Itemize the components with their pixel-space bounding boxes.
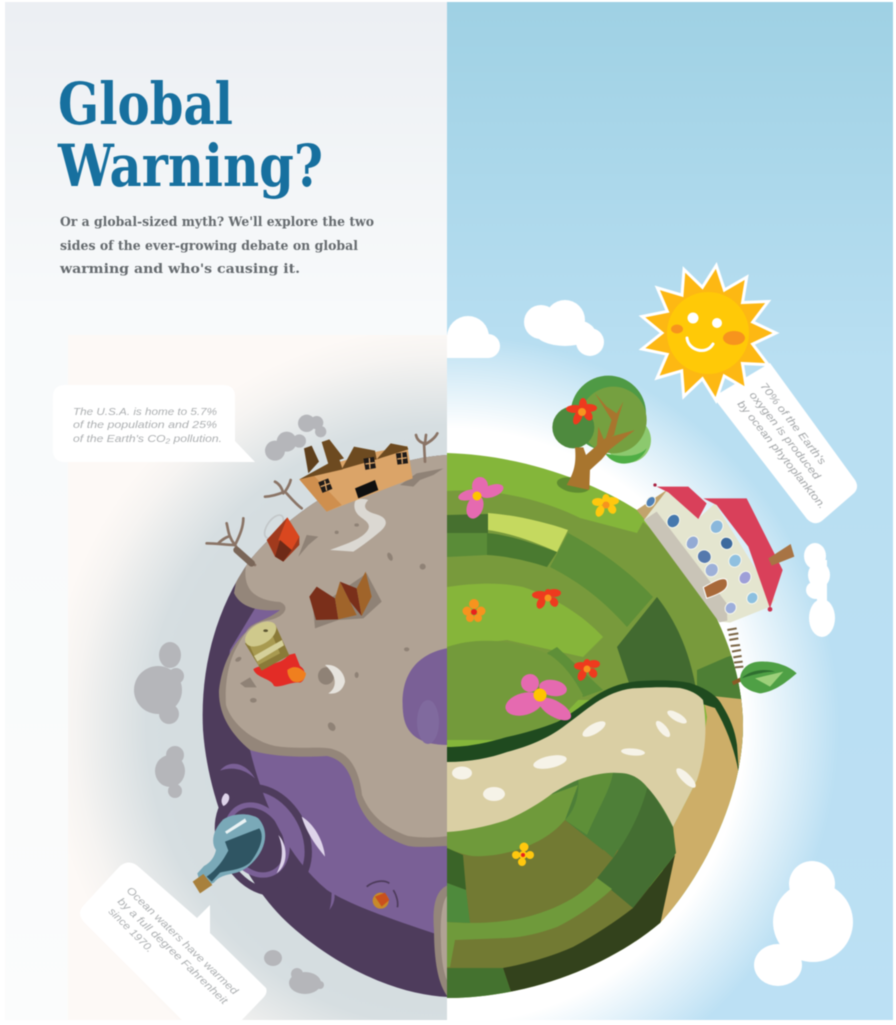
background: left half <box>5 2 447 1020</box>
upper fields <box>447 514 488 533</box>
title <box>57 70 323 200</box>
callout: ocean warming <box>80 862 267 1025</box>
flower: red <box>532 589 561 610</box>
bright field <box>447 584 603 657</box>
smoke clouds: polluted side <box>134 642 324 994</box>
road <box>447 687 705 832</box>
icon: burning house <box>261 512 299 562</box>
ocean dark rim <box>202 568 448 998</box>
small field <box>547 647 603 697</box>
icon: flowers <box>457 398 619 866</box>
callout: ocean warming: since 1970. <box>106 906 155 955</box>
subtitle: warming and who's causing it. <box>59 262 300 277</box>
below-road fields <box>446 850 634 968</box>
subtitle <box>59 215 374 277</box>
crescent <box>325 665 345 694</box>
subtitle: sides of the ever-growing debate on global <box>60 239 358 254</box>
title: Warning? <box>57 132 323 200</box>
callout: oxygen banner: 70% of the Earth's <box>758 381 829 468</box>
callout: U.S.A. pollution: of the Earth's CO₂ pollution. <box>73 433 222 445</box>
flower: red lower <box>574 659 600 682</box>
flower: yellow <box>592 494 619 518</box>
cloud: lower right <box>754 861 853 986</box>
smoke <box>265 415 326 461</box>
flower: yellow lower <box>512 842 534 866</box>
title: Global <box>58 70 233 138</box>
callout: oxygen banner <box>713 363 857 523</box>
ocean light purple <box>229 608 448 934</box>
icon: factory <box>265 415 413 512</box>
olive dome <box>447 641 583 740</box>
flower: pink top <box>457 477 505 521</box>
callout: ocean warming: Ocean waters have warmed <box>124 885 241 998</box>
flower: red on tree <box>566 398 597 426</box>
lake highlight <box>417 700 439 744</box>
door <box>703 579 728 598</box>
callout: oxygen banner: oxygen is produced <box>747 389 823 483</box>
olive band <box>447 490 750 700</box>
icon: bottle <box>193 814 265 893</box>
icon: small bush <box>733 661 797 693</box>
land sliver at bottom <box>434 885 448 997</box>
icon: sun <box>642 266 776 400</box>
subtitle: Or a global-sized myth? We'll explore the two <box>60 215 374 230</box>
callout: oxygen banner: by ocean phytoplankton. <box>735 398 828 512</box>
callout: ocean warming: by a full degree Fahrenheit <box>115 896 231 1008</box>
pale stream <box>330 499 386 552</box>
icon: house <box>637 483 794 623</box>
road border <box>447 680 739 775</box>
background: right half <box>447 2 893 1020</box>
land taupe <box>226 445 448 838</box>
ocean swirl <box>201 764 398 910</box>
flower: large pink <box>503 671 575 725</box>
base below road <box>551 772 674 870</box>
callout: U.S.A. pollution: The U.S.A. is home to 5.7% <box>73 406 217 418</box>
grey blotches <box>234 468 443 732</box>
icon: oil barrel and spill <box>241 616 306 686</box>
edge field <box>696 656 743 765</box>
windows <box>644 495 760 616</box>
globe: green half <box>447 450 750 1000</box>
globe: polluted half <box>190 440 448 1010</box>
callout: U.S.A. pollution: of the population and 25% <box>73 419 217 431</box>
small sinking object <box>373 893 389 909</box>
icon: fence <box>727 628 743 667</box>
road markings <box>452 708 698 801</box>
cloud: right of globe <box>804 543 835 637</box>
flower: orange <box>462 599 486 622</box>
icon: dead trees <box>207 433 437 565</box>
land border <box>218 567 448 848</box>
icon: collapsed building <box>309 572 382 628</box>
clouds: upper sky <box>447 300 604 358</box>
tan edge <box>660 696 744 922</box>
polluted land details <box>234 468 443 732</box>
callout: U.S.A. pollution <box>53 385 255 462</box>
icon: tree <box>552 376 651 495</box>
